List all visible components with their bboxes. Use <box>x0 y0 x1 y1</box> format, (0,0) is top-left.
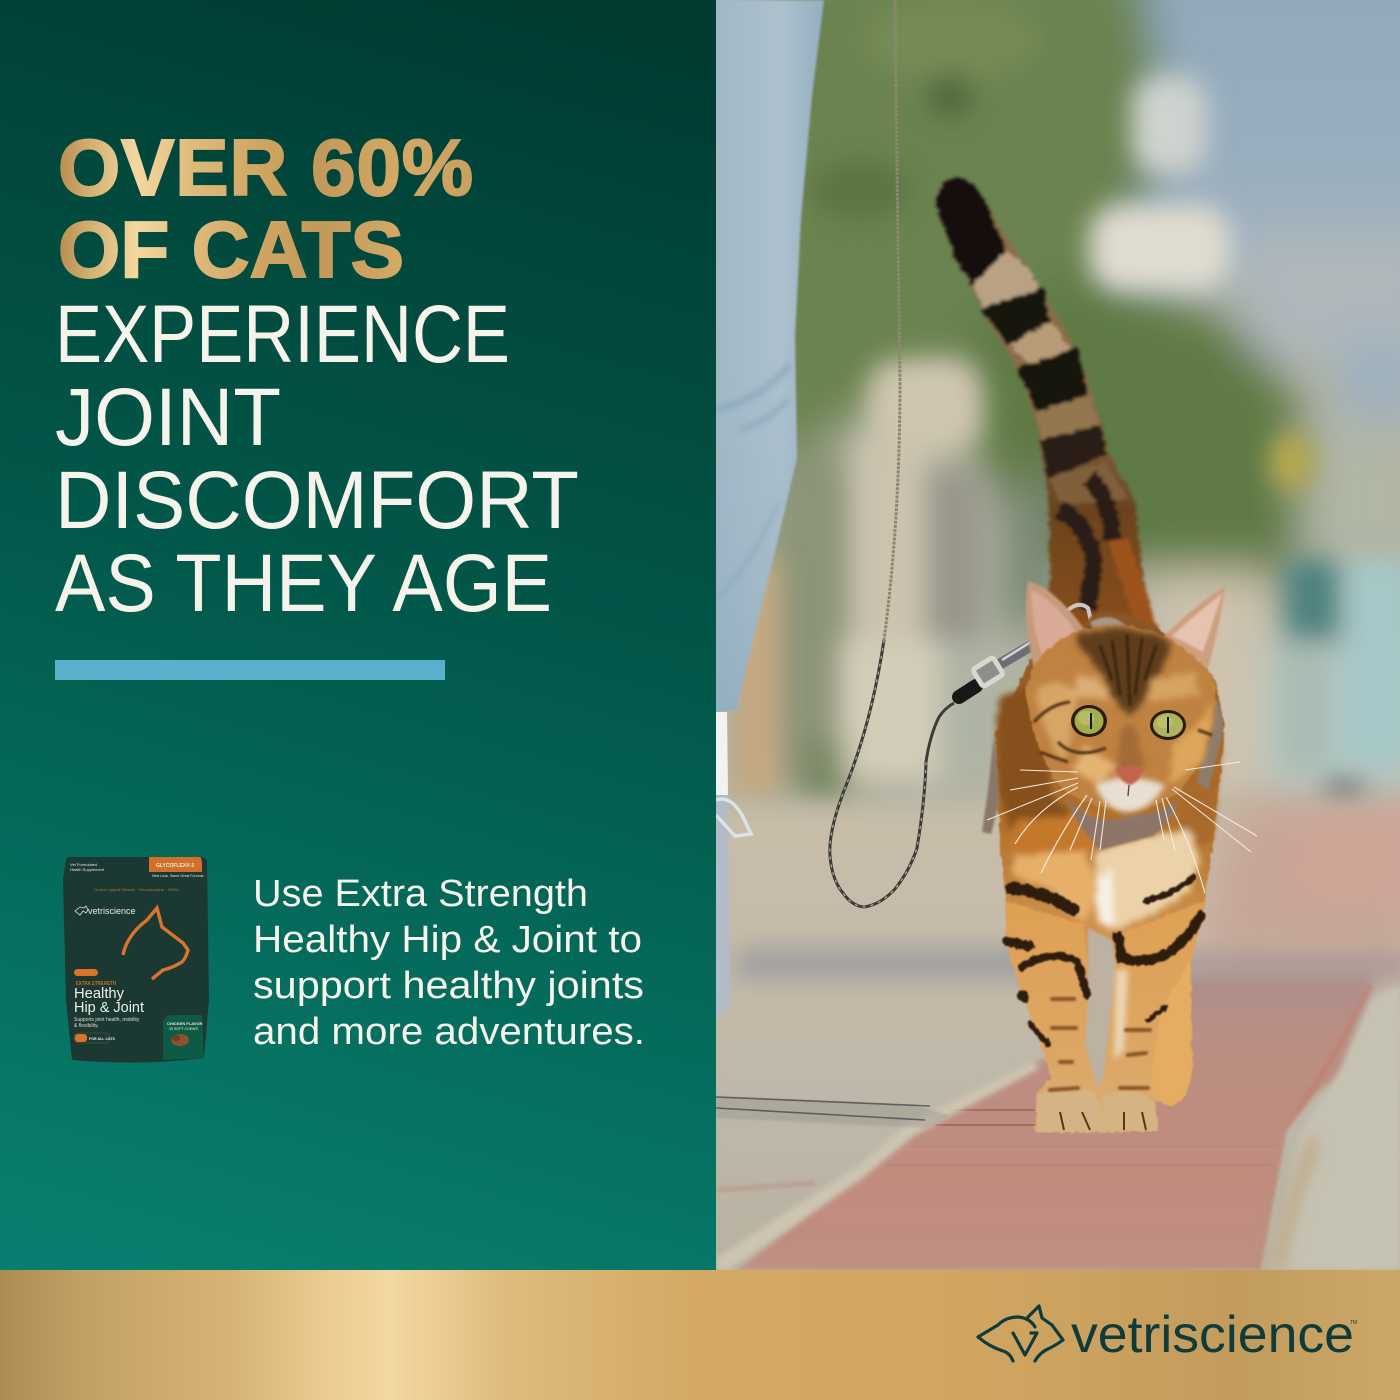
product pouch: New Look. Same Great Formula <box>152 874 204 878</box>
eye markings <box>1034 702 1212 762</box>
product pouch: CHICKEN FLAVOR <box>167 1021 203 1026</box>
headline: DISCOMFORT <box>55 455 579 546</box>
toes <box>1060 1112 1146 1130</box>
tiger stripes <box>1008 877 1201 1044</box>
pouch cat outline <box>123 908 188 979</box>
headline: EXPERIENCE <box>55 289 510 380</box>
body shading patches <box>998 680 1222 930</box>
product pouch: & flexibility. <box>74 1023 99 1029</box>
whiskers <box>987 762 1257 893</box>
headline: OVER 60% <box>58 123 473 212</box>
headline: OF CATS <box>58 205 404 294</box>
gap between legs <box>1084 928 1116 1090</box>
ears <box>1025 580 1084 668</box>
rear leg <box>1150 958 1192 1106</box>
ground: pavers, red path, sidewalk <box>690 800 1400 1295</box>
nose <box>1115 766 1144 785</box>
sidewalk <box>1284 988 1400 1270</box>
right front leg <box>1102 902 1206 1081</box>
supporting copy: Use Extra Strength <box>253 873 588 915</box>
cat tail <box>936 178 1158 660</box>
eyes <box>1071 705 1186 740</box>
headline: JOINT <box>55 372 281 463</box>
product pouch: Supports joint health, mobility <box>74 1017 140 1023</box>
vetriscience logo: vetriscience <box>1071 1306 1354 1364</box>
muzzle <box>1095 778 1165 812</box>
accent bar <box>55 660 445 680</box>
left panel: teal gradient with headline and product <box>0 0 716 1270</box>
product pouch: Health Supplement <box>70 867 105 872</box>
headline: AS THEY AGE <box>55 538 552 629</box>
cat head <box>987 581 1257 893</box>
product pouch: Green Lipped Mussel · Glucosamine · MSM <box>94 888 178 892</box>
supporting copy <box>253 873 645 1053</box>
photo panel: cat walking on a leash <box>690 0 1400 1295</box>
leash <box>830 0 954 907</box>
product pouch: Hip & Joint <box>74 999 145 1016</box>
red path lower <box>738 1060 1345 1270</box>
supporting copy: support healthy joints <box>253 965 644 1007</box>
path joints and edge <box>840 985 1370 1270</box>
product pouch: EXTRA STRENGTH <box>76 981 116 987</box>
product pouch: Healthy <box>74 985 124 1002</box>
product pouch: FOR ALL CATS <box>89 1037 115 1041</box>
person's leg in jeans <box>716 0 824 1022</box>
harness <box>982 617 1223 850</box>
shadow on pavers <box>716 1096 950 1128</box>
left front leg <box>1004 902 1097 1087</box>
pouch green flavor box <box>163 1015 204 1060</box>
product pouch <box>63 857 209 1063</box>
shoe and lace <box>716 712 730 1022</box>
face shading <box>1036 628 1214 785</box>
gold footer band <box>0 1270 1400 1400</box>
logo mark <box>978 1306 1063 1361</box>
headline <box>55 123 579 629</box>
leash clip and handle <box>959 605 1092 697</box>
product pouch: Vet Formulated <box>70 862 97 867</box>
curb <box>716 1062 1040 1270</box>
supporting copy: and more adventures. <box>253 1011 645 1053</box>
red path upper, out of focus <box>1190 974 1376 1090</box>
blurred street background <box>733 0 1400 810</box>
product pouch: 30 SOFT CHEWS <box>169 1027 198 1031</box>
pouch flavor tag <box>149 857 202 872</box>
pouch brand: vetriscience <box>88 906 136 916</box>
skull <box>1026 625 1216 811</box>
product pouch: GLYCOFLEX® 3 <box>156 862 194 869</box>
cat body <box>995 612 1225 1132</box>
vetriscience logo: TM <box>1350 1320 1357 1326</box>
supporting copy: Healthy Hip & Joint to <box>253 919 642 961</box>
